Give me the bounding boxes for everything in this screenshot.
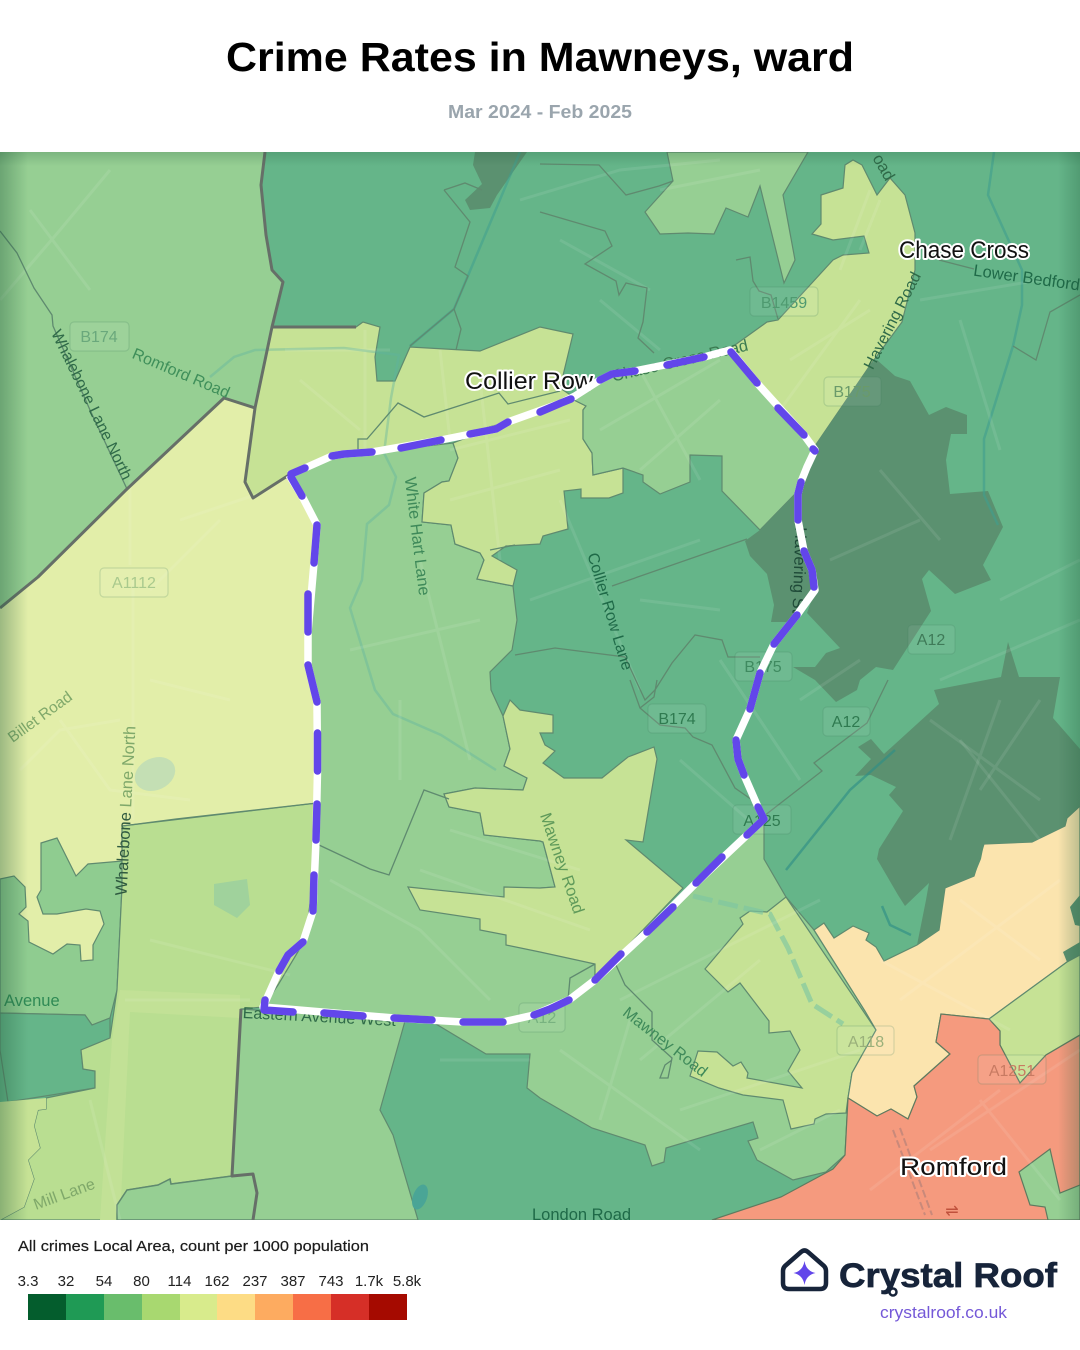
label: Havering Road: Havering Road: [861, 270, 925, 372]
map base: mid green areas: [0, 152, 1080, 1220]
label: road fragment: oad: [869, 151, 898, 184]
region: south-west lower lime: [0, 1098, 46, 1220]
label: Billet Road: Billet Road: [5, 688, 76, 746]
region: dark green top patch: [465, 152, 527, 210]
icon: logo tail dot: [890, 1288, 896, 1296]
region: green patch in salmon: [1019, 1149, 1080, 1220]
region: south-west lime: [0, 803, 317, 1220]
label: A1112: A1112: [112, 575, 156, 592]
label: A12: A12: [917, 632, 945, 649]
label: A118: A118: [848, 1034, 884, 1051]
region: cream edge green patches: [1070, 895, 1080, 926]
shield: A12 east: [908, 625, 955, 654]
label: A12 south: A12: [528, 1010, 556, 1027]
map vignette right: [1058, 152, 1080, 1220]
label: Romford Road: Romford Road: [130, 346, 232, 402]
thin area boundaries: [0, 164, 1080, 1078]
place: Chase Cross: Chase Cross: [899, 237, 1029, 264]
label: B1459: B1459: [761, 295, 807, 312]
region: Eastern Avenue south light green: [232, 1009, 418, 1220]
region: north-west light green: [0, 152, 283, 608]
region: south-east lime: [690, 897, 876, 1129]
place: Collier Row: Collier Row: [465, 368, 594, 395]
legend scale values: 3.3: [18, 1273, 38, 1290]
ward boundary: white casing: [263, 350, 815, 1022]
region: Mawney Road lime: [408, 700, 683, 980]
subtitle: date range: Mar 2024 - Feb 2025: [448, 101, 632, 122]
label: Eastern Avenue West: Eastern Avenue West: [242, 1005, 397, 1030]
water: lime pond: [214, 879, 250, 918]
label: B174 lower: B174: [658, 711, 696, 728]
label: Lower Bedford: Lower Bedford: [972, 262, 1080, 294]
legend scale values: 743: [318, 1273, 344, 1290]
label: Mawney Road north: Mawney Road: [536, 811, 587, 916]
thick area boundaries: [0, 152, 356, 1220]
label: B174: B174: [80, 329, 118, 346]
label: B175 lower: B175: [744, 659, 782, 676]
region: far-west mid green: [0, 1013, 110, 1102]
region: north-east ward light green: [574, 350, 815, 530]
legend scale values: 162: [204, 1273, 230, 1290]
shield: A12 south: [519, 1003, 565, 1032]
legend scale values: 237: [242, 1273, 268, 1290]
legend scale values: 1.7k: [355, 1273, 384, 1290]
place: Romford: Romford: [900, 1154, 1007, 1181]
label: Mill Lane: Mill Lane: [31, 1176, 98, 1214]
legend scale values: 114: [168, 1273, 191, 1290]
region: east lime: [989, 955, 1080, 1083]
rail tracks: [893, 1128, 932, 1215]
region: pale yellow west: [0, 398, 318, 961]
region: Collier Row north lime: [245, 322, 575, 498]
legend scale values: 32: [58, 1273, 74, 1290]
legend scale values: 54: [96, 1273, 112, 1290]
region: Collier Row south lime: [422, 400, 623, 586]
legend scale values: 5.8k: [393, 1273, 422, 1290]
road shields: [70, 287, 1046, 1084]
icon: house outline: [783, 1250, 826, 1289]
logo: Crystal Roof: [783, 1250, 1058, 1322]
region: north patch light green: [645, 152, 808, 283]
legend scale values: [18, 1273, 422, 1290]
map vignette top: [0, 152, 1080, 166]
label: Collier Row Lane: Collier Row Lane: [583, 551, 635, 673]
shield: A1112: [100, 568, 168, 597]
legend title: All crimes Local Area, count per 1000 population: [18, 1238, 369, 1255]
region: east edge green patch: [1063, 942, 1080, 962]
region: salmon Romford centre: [712, 1014, 1080, 1220]
water: north stream: [410, 152, 520, 346]
map vignette left: [0, 152, 28, 1220]
label: Chase Cross Road: Chase Cross Road: [610, 337, 750, 386]
region: south light green: [436, 819, 876, 1180]
label: North Street: Havering St: [788, 527, 809, 614]
label: Avenue: Avenue: [4, 992, 60, 1010]
logo url: crystalroof.co.uk: [880, 1304, 1008, 1322]
ward boundary: purple dashes: [264, 352, 815, 1022]
title: Crime Rates in Mawneys, ward: [226, 34, 854, 80]
logo wordmark: Crystal Roof: [839, 1257, 1058, 1295]
place labels: [465, 237, 1029, 1181]
region: south-west road strip: [100, 990, 240, 1220]
choropleth map panel: [0, 151, 1080, 1224]
icon: sparkle star: [794, 1261, 816, 1285]
shield: A1251: [978, 1055, 1046, 1084]
water: east stream: [984, 152, 1022, 525]
water and ponds: [129, 152, 1022, 1212]
region: far-west light green: [0, 838, 122, 1025]
legend scale values: 387: [280, 1273, 306, 1290]
icon: rail station: ⇌: [945, 1203, 959, 1220]
shield: B175 south: [735, 652, 792, 681]
label: A125: A125: [743, 813, 781, 830]
faint street network: [0, 160, 1080, 1220]
region: Chase Cross lime: [728, 160, 915, 446]
region: cream Romford north: [814, 806, 1080, 1119]
legend colour bar: [28, 1294, 407, 1320]
region: dark green south-east: [855, 642, 1080, 945]
shield: B174 south: [648, 704, 706, 733]
label: Whalebone Lane North lower: Whalebone Lane North: [113, 726, 139, 896]
legend scale values: 80: [133, 1273, 150, 1290]
label: Whalebone Lane North upper: Whalebone Lane North: [47, 327, 135, 483]
water: southern pond: [412, 1184, 428, 1210]
region: ward west light green: [263, 443, 595, 1022]
label: White Hart Lane: White Hart Lane: [401, 476, 433, 597]
shield: A118: [837, 1026, 894, 1055]
legend: [18, 1238, 422, 1320]
label: London Road: London Road: [532, 1206, 631, 1224]
region: bottom patch light green: [117, 1174, 257, 1220]
water: pond in pale area: [134, 757, 176, 791]
shield: A125: [733, 805, 791, 834]
label: A1251: A1251: [989, 1063, 1035, 1080]
road labels: [4, 151, 1080, 1224]
shield: A12 middle: [823, 707, 870, 736]
water: upper stream: [210, 348, 496, 770]
shield: B174 west: [70, 322, 129, 351]
shield: B175 north: [824, 377, 881, 406]
shield: B1459: [750, 287, 818, 316]
region: dark green central: [745, 360, 1003, 702]
water: canal through south-east lime: [693, 896, 843, 1024]
label: A12 middle: A12: [832, 714, 860, 731]
label: Mawney Road south: Mawney Road: [619, 1004, 710, 1081]
label: B175: B175: [833, 384, 871, 401]
water: south-east stream: [786, 750, 911, 935]
